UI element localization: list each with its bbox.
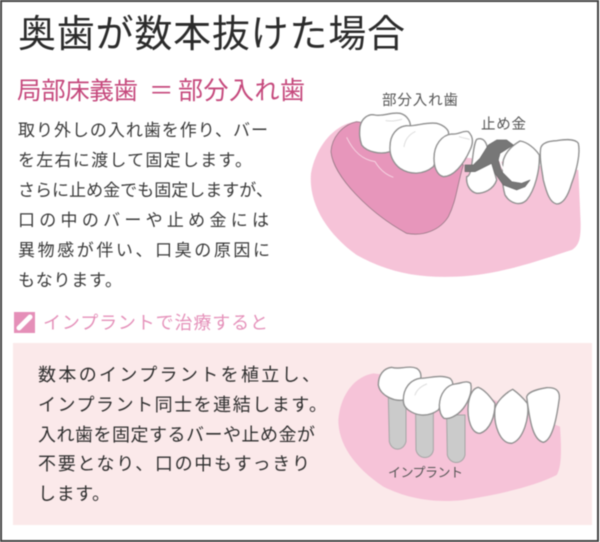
subtitle: ＝ [149, 78, 174, 105]
natural teeth [467, 139, 579, 204]
illustration: implant bridge [338, 367, 561, 501]
text block: partial denture description: 口の中のバーや止め金には [18, 211, 269, 230]
subtitle: 部分入れ歯 [178, 77, 305, 105]
denture highlight [347, 137, 393, 177]
text block: implant description: 数本のインプラントを植立し、 [38, 364, 320, 385]
denture teeth [360, 113, 472, 177]
metal clasp [465, 140, 530, 190]
clasp highlight [500, 157, 513, 180]
implant posts [388, 397, 465, 462]
text block: implant description: します。 [38, 484, 110, 504]
label: partial denture: 部分入れ歯 [382, 92, 458, 109]
text block: implant description: インプラント同士を連結します。 [38, 395, 327, 415]
text block: partial denture description: もなります。 [18, 271, 122, 290]
label: clasp: 止め金 [481, 116, 526, 133]
gum [338, 373, 561, 501]
label: implant: インプラント [388, 465, 463, 480]
denture base [331, 122, 463, 234]
gum [311, 122, 581, 277]
natural teeth [468, 387, 559, 443]
title: 奥歯が数本抜けた場合 [18, 14, 405, 56]
subtitle [17, 77, 305, 105]
heading: with implant treatment: インプラントで治療すると [43, 313, 268, 333]
illustration: partial denture [311, 113, 581, 277]
text block: partial denture description: 取り外しの入れ歯を作り、バー [18, 121, 268, 140]
text block: partial denture description: さらに止め金でも固定しますが、 [18, 181, 273, 200]
icon: pencil [14, 312, 35, 333]
text block: partial denture description [18, 121, 273, 290]
text block: implant description: 入れ歯を固定するバーや止め金が [38, 425, 315, 445]
subtitle: 局部床義歯 [17, 77, 138, 105]
text block: partial denture description: 異物感が伴い、口臭の原因に [18, 241, 270, 260]
text block: partial denture description: を左右に渡して固定します。 [18, 151, 252, 170]
panel: implant treatment [13, 343, 592, 525]
implant crowns [378, 367, 471, 419]
text block: implant description: 不要となり、口の中もすっきり [38, 454, 310, 474]
text block: implant description [38, 364, 327, 504]
